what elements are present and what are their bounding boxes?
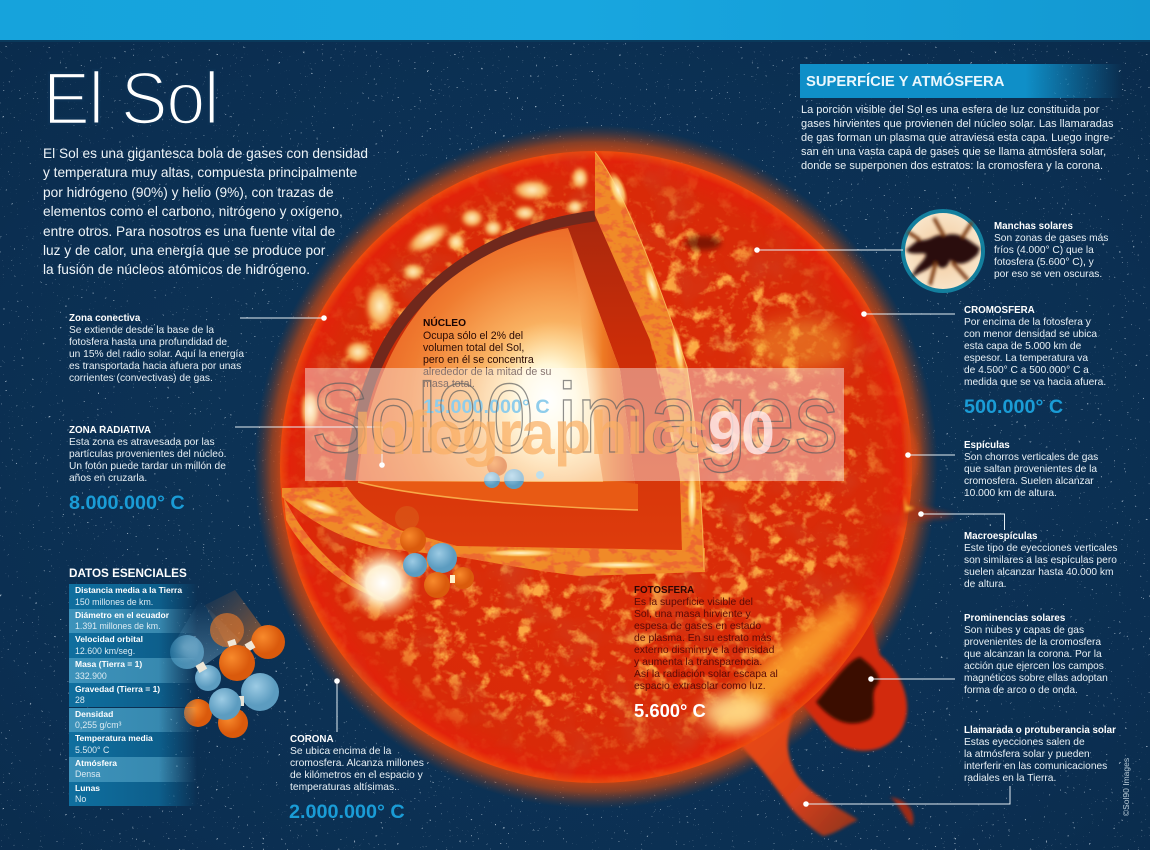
- temperature: nucleo: 15.000.000° C: [423, 396, 550, 418]
- header band: superficie y atmosfera: [800, 64, 1122, 98]
- text: zona radiativa: [69, 425, 226, 484]
- text: zona conectiva: es transportada hacia afuera por unas: [69, 361, 241, 372]
- text: manchas solares: Son zonas de gases más: [994, 233, 1108, 244]
- text: llamarada: Llamarada o protuberancia solar: [964, 725, 1116, 736]
- text: cromosfera: [964, 305, 1106, 388]
- table: datos esenciales: Densa: [75, 769, 100, 779]
- table: datos esenciales: 332.900: [75, 671, 107, 681]
- icon: sunspot inset: [901, 209, 985, 293]
- text: llamarada: interferir en las comunicaciones: [964, 761, 1107, 772]
- text: fotosfera: [634, 585, 778, 692]
- table: datos esenciales: 28: [75, 695, 85, 705]
- spicules and macrospicule: [904, 420, 955, 522]
- table: datos esenciales: Temperatura media: [75, 733, 153, 743]
- shell bands with texture: [282, 153, 705, 594]
- text: macroespiculas: [964, 531, 1118, 590]
- deep red radiative wall: [345, 215, 682, 552]
- table: datos esenciales: Atmósfera: [75, 758, 117, 768]
- text: cromosfera: de 4.500° C a 500.000° C a: [964, 365, 1089, 376]
- text: nucleo: volumen total del Sol,: [423, 342, 524, 354]
- text: llamarada: la atmósfera solar y pueden: [964, 749, 1090, 760]
- text: prominencias solares: Son nubes y capas de gas: [964, 625, 1084, 636]
- title: El Sol: [43, 57, 218, 140]
- intro text: entre otros. Para nosotros es una fuente vital de: [43, 224, 335, 239]
- nucleus floor: [358, 482, 638, 510]
- text: prominencias solares: Prominencias solares: [964, 613, 1065, 624]
- temperature: zona radiativa: 8.000.000° C: [69, 492, 185, 514]
- intro text: El Sol es una gigantesca bola de gases con densidad: [43, 146, 368, 161]
- nucleus right strip: [568, 228, 638, 508]
- text: macroespiculas: suelen alcanzar hasta 40.000 km: [964, 567, 1114, 578]
- text: fotosfera: Es la superficie visible del: [634, 597, 753, 608]
- text: fotosfera: externo disminuye la densidad: [634, 645, 774, 656]
- table: datos esenciales: Lunas: [75, 783, 100, 793]
- text: fotosfera: Sol, una masa hirviente y: [634, 609, 751, 620]
- table: datos esenciales: Distancia media a la Tierra: [75, 585, 182, 595]
- text: zona radiativa: años en cruzarla.: [69, 473, 147, 484]
- text: corona: CORONA: [290, 734, 334, 745]
- text: nucleo: alrededor de la mitad de su: [423, 366, 551, 378]
- text: cromosfera: Por encima de la fotosfera y: [964, 317, 1091, 328]
- white patches on the shell: [300, 166, 589, 432]
- text: zona conectiva: [69, 313, 244, 384]
- text: fotosfera: FOTOSFERA: [634, 585, 694, 596]
- table: datos esenciales: 1.391 millones de km.: [75, 621, 161, 631]
- text: zona conectiva: Zona conectiva: [69, 313, 140, 324]
- temperature: fotosfera: 5.600° C: [634, 700, 706, 721]
- text: macroespiculas: Macroespículas: [964, 531, 1038, 542]
- table: datos esenciales: 150 millones de km.: [75, 596, 153, 606]
- text: superficie y atmosfera: san en una vasta capa de gases que se llama atmósfera solar,: [801, 146, 1106, 158]
- heading: superficie y atmosfera: SUPERFÍCIE Y ATMÓSFERA: [806, 74, 1004, 90]
- text: manchas solares: fríos (4.000° C) que la: [994, 245, 1094, 256]
- text: espiculas: 10.000 km de altura.: [964, 488, 1057, 499]
- text: llamarada: [964, 725, 1116, 784]
- callout lines: [235, 250, 1010, 804]
- text: corona: temperaturas altísimas.: [290, 782, 397, 793]
- text: superficie y atmosfera: de gas forman un plasma que atraviesa esta capa. Luego ingre-: [801, 132, 1113, 144]
- text: corona: Se ubica encima de la: [290, 746, 391, 757]
- text: prominencias solares: provenientes de la cromosfera: [964, 637, 1101, 648]
- intro text: y temperatura muy altas, compuesta principalmente: [43, 165, 357, 180]
- text: superficie y atmosfera: donde se superponen dos estratos: la cromosfera y la corona.: [801, 160, 1103, 172]
- text: cromosfera: CROMOSFERA: [964, 305, 1035, 316]
- intro text: elementos como el carbono, nitrógeno y oxígeno,: [43, 204, 343, 219]
- top bar: [0, 0, 1150, 42]
- text: espiculas: que saltan provenientes de la: [964, 464, 1097, 475]
- text: corona: [290, 734, 424, 793]
- text: zona conectiva: un 15% del radio solar. Aquí la energía: [69, 349, 244, 360]
- text: nucleo: NÚCLEO: [423, 318, 466, 329]
- table: datos esenciales: Masa (Tierra = 1): [75, 659, 142, 669]
- text: espiculas: Espículas: [964, 440, 1010, 451]
- table: datos esenciales: 12.600 km/seg.: [75, 646, 135, 656]
- sun disc: [280, 151, 912, 783]
- text: manchas solares: por eso se ven oscuras.: [994, 269, 1102, 280]
- callout dots: [321, 247, 924, 807]
- text: nucleo: masa total.: [423, 378, 475, 390]
- temperature: cromosfera: 500.000° C: [964, 396, 1063, 418]
- copyright: ©Sol90 Images: [1121, 758, 1131, 816]
- intro text: por hidrógeno (90%) y helio (9%), con trazas de: [43, 185, 334, 200]
- text: corona: cromosfera. Alcanza millones: [290, 758, 424, 769]
- text: prominencias solares: [964, 613, 1108, 696]
- text: fotosfera: de plasma. En su estrato más: [634, 633, 771, 644]
- text: espiculas: cromosfera. Suelen alcanzar: [964, 476, 1094, 487]
- text: manchas solares: fotosfera (5.600° C), y: [994, 257, 1094, 268]
- cutaway interior: [282, 152, 705, 594]
- intro text: luz y de calor, una energía que se produce por: [43, 243, 325, 258]
- text: fotosfera: Así la radiación solar escapa al: [634, 669, 778, 680]
- text: fotosfera: espacio extrasolar como luz.: [634, 681, 766, 692]
- text: nucleo: pero en él se concentra: [423, 354, 534, 366]
- text: zona radiativa: Un fotón puede tardar un millón de: [69, 461, 226, 472]
- text: prominencias solares: que alcanzan la corona. Por la: [964, 649, 1102, 660]
- text: prominencias solares: forma de arco o de onda.: [964, 685, 1078, 696]
- table: datos esenciales: Densidad: [75, 708, 113, 718]
- text: manchas solares: [994, 221, 1108, 280]
- table: datos esenciales: 5.500° C: [75, 745, 109, 755]
- text: macroespiculas: de altura.: [964, 579, 1006, 590]
- text: zona radiativa: Esta zona es atravesada por las: [69, 437, 215, 448]
- text: zona conectiva: fotosfera hasta una profundidad de: [69, 337, 227, 348]
- text: superficie y atmosfera: gases hirvientes que provienen del núcleo solar. Las llamaradas: [801, 118, 1113, 130]
- text: fotosfera: espesa de gases en estado: [634, 621, 761, 632]
- heading: datos esenciales: DATOS ESENCIALES: [69, 567, 187, 580]
- dark arc of inner layer: [350, 216, 595, 480]
- atom cluster: datos esenciales: [170, 590, 285, 738]
- text: cromosfera: espesor. La temperatura va: [964, 353, 1088, 364]
- text: manchas solares: Manchas solares: [994, 221, 1073, 232]
- text: zona radiativa: partículas provenientes del núcleo.: [69, 449, 226, 460]
- intro text: la fusión de núcleos atómicos de hidrógeno.: [43, 262, 310, 277]
- table: datos esenciales: No: [75, 794, 86, 804]
- text: espiculas: Son chorros verticales de gas: [964, 452, 1098, 463]
- text: macroespiculas: Este tipo de eyecciones verticales: [964, 543, 1117, 554]
- table: datos esenciales: 0,255 g/cm³: [75, 720, 121, 730]
- table: datos esenciales: Diámetro en el ecuador: [75, 610, 169, 620]
- text: llamarada: Estas eyecciones salen de: [964, 737, 1085, 748]
- text: nucleo: [423, 316, 551, 390]
- watermark: Infographics90: [354, 399, 774, 467]
- text: zona conectiva: corrientes (convectivas) de gas.: [69, 373, 213, 384]
- text: llamarada: radiales en la Tierra.: [964, 773, 1056, 784]
- text: superficie y atmosfera: [801, 104, 1114, 172]
- solar flare: [735, 700, 914, 836]
- table: datos esenciales: Velocidad orbital: [75, 634, 143, 644]
- intro text: [43, 146, 368, 277]
- solar prominence: [760, 600, 907, 751]
- table: datos esenciales: [69, 584, 196, 806]
- core atoms: [484, 456, 544, 489]
- text: zona radiativa: ZONA RADIATIVA: [69, 425, 151, 436]
- temperature: corona: 2.000.000° C: [289, 801, 405, 823]
- table: datos esenciales: Gravedad (Tierra = 1): [75, 684, 160, 694]
- text: prominencias solares: magnéticos sobre ellas adoptan: [964, 673, 1108, 684]
- text: macroespiculas: son similares a las espículas pero: [964, 555, 1117, 566]
- glare and atoms on the sun: [345, 506, 474, 621]
- text: superficie y atmosfera: La porción visible del Sol es una esfera de luz constituida por: [801, 104, 1099, 116]
- nucleus wedge: [358, 228, 638, 508]
- text: espiculas: [964, 440, 1098, 499]
- text: cromosfera: esta capa de 5.000 km de: [964, 341, 1081, 352]
- text: nucleo: Ocupa sólo el 2% del: [423, 330, 523, 342]
- text: fotosfera: y aumenta la transparencia.: [634, 657, 762, 668]
- text: cromosfera: medida que se va hacia afuera.: [964, 377, 1106, 388]
- text: prominencias solares: acción que ejercen los campos: [964, 661, 1104, 672]
- sun: [254, 125, 955, 836]
- text: zona conectiva: Se extiende desde la base de la: [69, 325, 214, 336]
- text: cromosfera: con menor densidad se ubica: [964, 329, 1097, 340]
- text: corona: de kilómetros en el espacio y: [290, 770, 423, 781]
